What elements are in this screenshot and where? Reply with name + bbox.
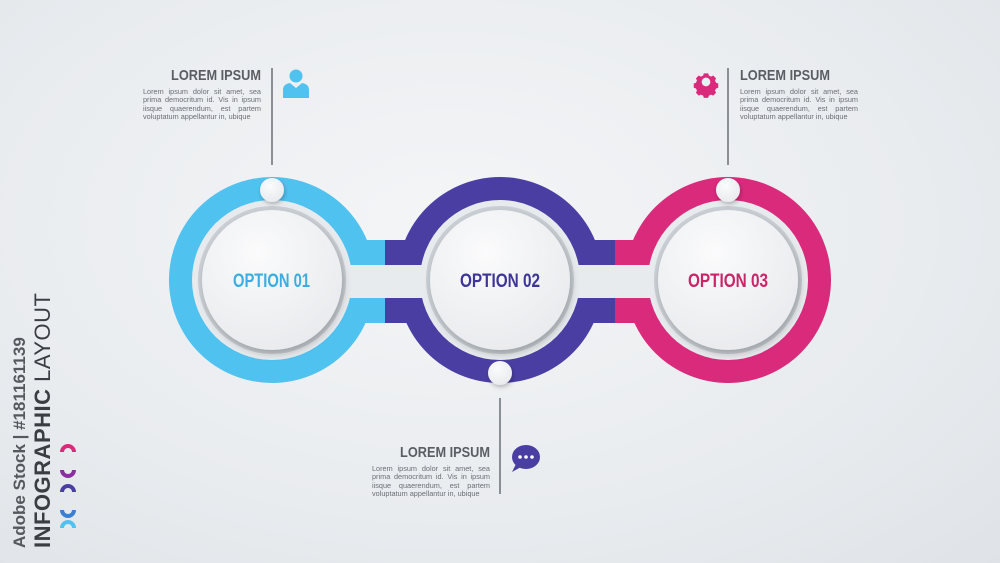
text: top right — [740, 67, 858, 121]
circle 3: OPTION 03 — [688, 271, 768, 292]
circle 1 — [192, 200, 352, 360]
icon: gear — [694, 73, 718, 98]
text: top right: Lorem ipsum dolor sit amet, sea prima democritum id. Vis in ipsum iisque quaerendum, est partem voluptatum appellantur in, ubique — [740, 87, 858, 121]
text: top right: LOREM IPSUM — [740, 67, 830, 84]
circle 1: OPTION 01 — [233, 271, 310, 292]
side title: Adobe Stock | #181161139 — [10, 337, 29, 548]
icon: person — [283, 70, 309, 98]
connector lines — [271, 68, 272, 165]
text: top left: Lorem ipsum dolor sit amet, sea prima democritum id. Vis in ipsum iisque quaerendum, est partem voluptatum appellantur in, ubique — [143, 87, 261, 121]
icon: speech bubble — [512, 445, 540, 472]
text: bottom: Lorem ipsum dolor sit amet, sea prima democritum id. Vis in ipsum iisque quaerendum, est partem voluptatum appellantur in, ubique — [372, 464, 490, 498]
side title: INFOGRAPHIC LAYOUT — [30, 292, 55, 548]
rings — [169, 177, 831, 383]
side title — [10, 292, 55, 548]
circle 2: OPTION 02 — [460, 271, 540, 292]
knobs — [260, 178, 740, 385]
connectors — [272, 240, 728, 323]
circle 2 — [420, 200, 580, 360]
text: top left: LOREM IPSUM — [171, 67, 261, 84]
icon: side arcs — [62, 446, 74, 528]
circle 3 — [648, 200, 808, 360]
text: top left — [143, 67, 261, 121]
text: bottom — [372, 444, 490, 498]
text: bottom: LOREM IPSUM — [400, 444, 490, 461]
